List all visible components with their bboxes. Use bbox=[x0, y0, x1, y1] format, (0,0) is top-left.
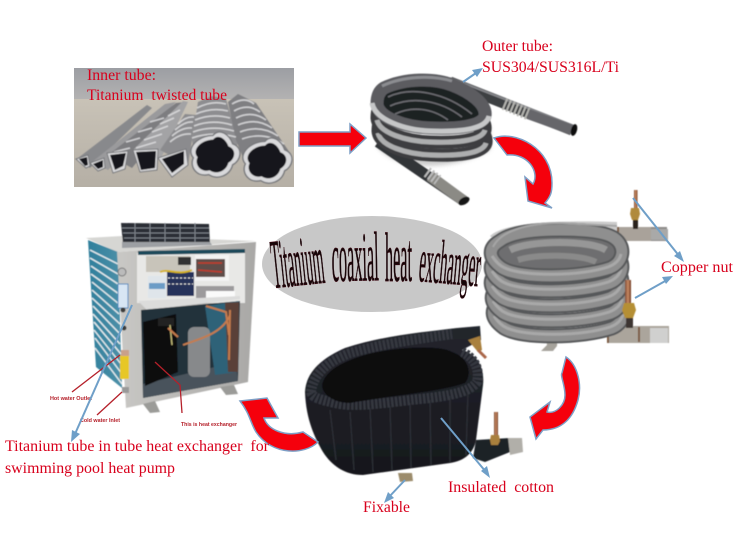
caption: heat pump bbox=[5, 438, 270, 477]
title: wordart text: coaxial bbox=[331, 219, 379, 297]
label: outer tube bbox=[482, 38, 620, 76]
ports bbox=[120, 308, 129, 393]
arrow: pointer to fixable bbox=[384, 480, 405, 503]
arrow: pointer to outer tube bbox=[463, 68, 483, 82]
lower tube end bbox=[378, 142, 471, 207]
inner coil opening bbox=[322, 348, 469, 403]
side fin panel bbox=[88, 240, 122, 388]
title: wordart text: heat bbox=[385, 220, 412, 297]
small label: hot water outlet: Hot water Outlet bbox=[50, 396, 92, 402]
ellipse bbox=[262, 216, 482, 312]
arrow: pointer to heat pump caption bbox=[71, 305, 132, 442]
coil windings bbox=[491, 223, 624, 336]
valve: bottom copper nut bbox=[622, 280, 636, 328]
top connector bbox=[617, 227, 668, 241]
arrow: pointer to insulated cotton bbox=[441, 418, 490, 478]
insulation ribbed rim bbox=[311, 334, 478, 405]
red annotation lines bbox=[72, 355, 182, 415]
arrow: outer tube to bare coil bbox=[494, 136, 552, 208]
lower compartment bbox=[141, 301, 240, 398]
feet bbox=[143, 385, 238, 413]
title: wordart text: Titanium bbox=[268, 222, 327, 304]
top fitting bbox=[468, 336, 486, 358]
label: fixable: Fixable bbox=[363, 499, 410, 516]
coil back shadow bbox=[490, 221, 617, 245]
fixing foot bbox=[398, 473, 413, 482]
photo background bbox=[74, 68, 294, 187]
arrow: insulated coil to heat pump bbox=[240, 398, 318, 451]
valve: top copper nut bbox=[630, 190, 640, 229]
fan guard bbox=[121, 223, 212, 248]
compressor bbox=[143, 314, 210, 386]
caption: heat pump: Titanium tube in tube heat exchanger for bbox=[5, 438, 270, 455]
panel: bare coaxial coil bbox=[490, 190, 669, 351]
panel: insulated coil bbox=[305, 326, 523, 482]
copper piping bbox=[168, 306, 230, 360]
twisted titanium tubes bbox=[76, 94, 292, 183]
valve on insulated coil bbox=[490, 412, 500, 445]
arrow: pointer to top copper nut bbox=[633, 198, 684, 262]
control box bbox=[137, 249, 245, 303]
label: insulated cotton: Insulated cotton bbox=[448, 479, 554, 496]
bottom connector bbox=[607, 326, 669, 343]
title: wordart text bbox=[268, 219, 484, 304]
label: copper nut: Copper nut bbox=[661, 259, 734, 276]
central ellipse title bbox=[262, 216, 484, 312]
coil rings bbox=[372, 77, 489, 155]
small label: cold water inlet: Cold water Inlet bbox=[80, 418, 120, 424]
upper tube end bbox=[450, 78, 578, 137]
insulated connector bbox=[473, 438, 523, 462]
coil shadow bbox=[376, 125, 490, 166]
label: inner tube: Titanium twisted tube bbox=[87, 87, 227, 104]
caption: heat pump: swimming pool heat pump bbox=[5, 460, 175, 477]
panel: inner tube photo bbox=[74, 67, 294, 187]
panel: outer tube coil bbox=[372, 77, 578, 207]
small label: this is heat exchanger: This is heat exchanger bbox=[181, 422, 238, 428]
label: outer tube: SUS304/SUS316L/Ti bbox=[482, 59, 620, 76]
insulation body bbox=[305, 326, 483, 475]
shelf bbox=[138, 296, 240, 310]
label: inner tube bbox=[87, 67, 227, 104]
arrow: inner tube to outer tube bbox=[299, 124, 366, 153]
label: outer tube: Outer tube: bbox=[482, 38, 553, 55]
vertical ribbing bbox=[330, 390, 468, 472]
panel: swimming pool heat pump bbox=[86, 223, 256, 413]
label: inner tube: Inner tube: bbox=[87, 67, 156, 84]
top cover bbox=[86, 236, 256, 252]
foot bracket bbox=[541, 331, 558, 351]
side label and gauge bbox=[118, 268, 129, 379]
text: exchanger bbox=[417, 227, 484, 300]
front frame bbox=[117, 242, 256, 408]
arrow: pointer to bottom copper nut bbox=[635, 276, 673, 298]
arrow: bare coil to insulated coil bbox=[530, 357, 580, 439]
